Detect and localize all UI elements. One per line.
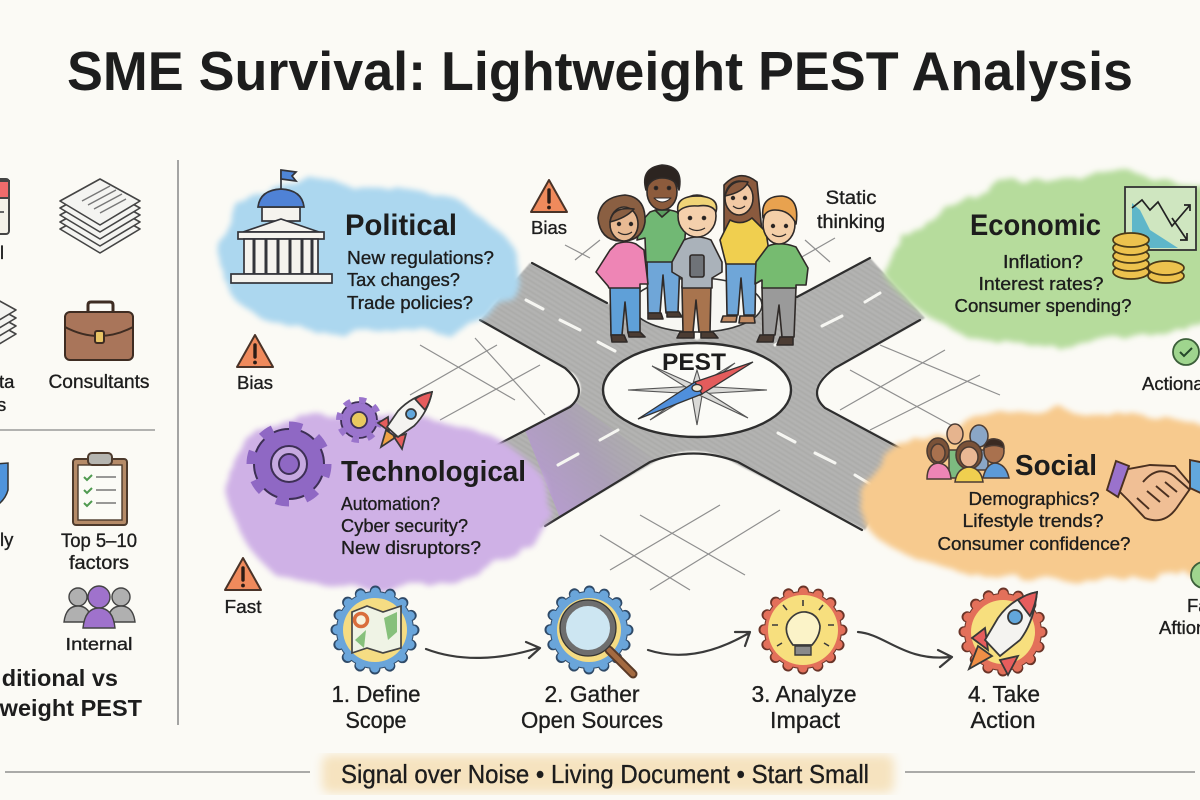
- questions: Trade policies?: [347, 292, 473, 313]
- text: quarterly: ly: [0, 529, 14, 550]
- panel: economic background: [885, 174, 1200, 346]
- questions: Consumer confidence?: [938, 533, 1130, 554]
- icon: coins: [1113, 233, 1184, 283]
- heading: traditional vs lightweight PEST: weight PEST: [0, 695, 143, 721]
- heading: Political: [345, 209, 457, 242]
- banner text: Signal over Noise • Living Document • Start Small: [341, 759, 869, 789]
- questions: Cyber security?: [341, 515, 468, 536]
- icon: check: [1191, 562, 1200, 588]
- text: top 5-10 factors: Top 5–10: [61, 531, 137, 552]
- questions: Consumer spending?: [954, 295, 1132, 316]
- icon: large gear: [251, 426, 327, 502]
- callout: static thinking: [817, 188, 885, 233]
- banner background: [322, 755, 894, 793]
- icon: handshake: [1107, 460, 1200, 520]
- icon: warning: [531, 180, 567, 212]
- warning: fast: [224, 558, 262, 617]
- text: consultants: Consultants: [48, 372, 150, 393]
- icon: capitol: [231, 170, 332, 283]
- step 3: analyze impact: [752, 591, 856, 733]
- person: blond front: [672, 195, 722, 338]
- callout: fast action: [1159, 562, 1200, 638]
- title: SME Survival: Lightweight PEST Analysis: [67, 40, 1133, 102]
- text: data reports: [0, 371, 15, 415]
- icon: crowd: [927, 424, 1009, 482]
- text: annual: l: [0, 243, 4, 263]
- icon: small gear: [339, 400, 379, 440]
- person: pink shirt: [596, 195, 648, 342]
- step 2: gather open sources: [521, 591, 663, 733]
- questions: Lifestyle trends?: [962, 510, 1104, 531]
- icon: check: [1173, 339, 1199, 365]
- icon: briefcase: [65, 302, 133, 360]
- questions: New regulations?: [347, 247, 494, 268]
- icon: rocket badge: [964, 592, 1042, 675]
- crossroads map: [410, 238, 1000, 590]
- icon: magnifier badge: [550, 591, 633, 674]
- road tint towards technological: [525, 402, 655, 518]
- icon: warning: [237, 335, 273, 367]
- heading: Technological: [341, 456, 526, 488]
- people group: [596, 165, 808, 345]
- label: 2. Gather: [544, 681, 640, 707]
- bottom rule: [5, 771, 1195, 773]
- icon: calendar: [0, 179, 9, 234]
- label: Impact: [770, 707, 841, 733]
- compass needle: [638, 362, 753, 419]
- label: 3. Analyze: [752, 681, 856, 707]
- questions: [954, 251, 1132, 316]
- label: Action: [970, 707, 1036, 733]
- vertical divider: [177, 160, 179, 725]
- label: [332, 681, 420, 733]
- heading: traditional vs lightweight PEST: [0, 665, 143, 721]
- label: Bias: [531, 218, 567, 238]
- questions: New disruptors?: [341, 537, 481, 558]
- road edges: [480, 258, 920, 530]
- text: top 5-10 factors: factors: [69, 553, 129, 574]
- compass: [603, 343, 791, 437]
- ground circle: [632, 278, 762, 332]
- text: internal: Internal: [66, 634, 132, 654]
- label: 1. Define: [332, 681, 420, 707]
- questions: [938, 488, 1130, 554]
- panel: political: [231, 170, 494, 313]
- icon: clipboard: [73, 453, 127, 525]
- icon: data stack: [0, 288, 16, 358]
- label: [968, 681, 1040, 733]
- label: Open Sources: [521, 707, 663, 733]
- label: Fast: [224, 597, 262, 617]
- icon: paper stack: [60, 179, 140, 253]
- icon: lightbulb badge: [764, 591, 842, 669]
- warning: bias left: [237, 335, 273, 393]
- panel: traditional vs lightweight PEST: [0, 179, 155, 721]
- questions: [341, 493, 481, 558]
- step 1: define scope: [332, 591, 420, 733]
- heading: traditional vs lightweight PEST: ditional vs: [2, 665, 118, 691]
- panel: political background: [221, 182, 521, 334]
- panel: social: [927, 424, 1200, 554]
- callout: static thinking: thinking: [817, 212, 885, 233]
- label: [521, 681, 663, 733]
- questions: Inflation?: [1003, 251, 1083, 272]
- compass label: PEST: [662, 349, 726, 376]
- label: [752, 681, 856, 733]
- text: top 5-10 factors: [61, 531, 137, 574]
- panel: technological background: [228, 415, 550, 586]
- lane markings: [526, 293, 880, 484]
- step 4: take action: [964, 592, 1042, 733]
- block street grids: [410, 238, 1000, 590]
- callout: static thinking: Static: [826, 188, 876, 209]
- panel: social background: [860, 411, 1200, 579]
- warning: bias top: [531, 180, 567, 238]
- label: [1159, 595, 1200, 638]
- heading: Economic: [970, 209, 1101, 242]
- person: yellow shirt: [720, 176, 770, 323]
- questions: Tax changes?: [347, 269, 460, 290]
- questions: [347, 247, 494, 313]
- label: Scope: [346, 707, 406, 733]
- person: green shirt: [637, 165, 686, 319]
- banner: key principles: [322, 755, 894, 793]
- questions: Interest rates?: [978, 273, 1104, 294]
- questions: Demographics?: [968, 488, 1100, 509]
- road surface: [480, 258, 925, 530]
- person: green shirt orange hair: [755, 196, 808, 345]
- label: Bias: [237, 373, 273, 393]
- heading: Social: [1015, 450, 1097, 482]
- arrow: step 2 to 3: [648, 632, 750, 655]
- panel: technological: [251, 392, 526, 558]
- callout: actionable: [1142, 339, 1200, 394]
- divider: [0, 429, 155, 431]
- icon: map badge: [336, 591, 414, 669]
- panel: economic: [954, 187, 1196, 316]
- icon: rocket: [378, 392, 432, 449]
- label: 4. Take: [968, 681, 1040, 707]
- questions: Automation?: [341, 493, 440, 514]
- arrow: step 3 to 4: [858, 632, 952, 667]
- icon: chart: [1125, 187, 1196, 250]
- compass star: [628, 363, 767, 425]
- icon: warning: [225, 558, 261, 590]
- icon: internal team: [64, 586, 135, 628]
- icon: shield: [0, 463, 8, 512]
- arrow: step 1 to 2: [426, 642, 540, 658]
